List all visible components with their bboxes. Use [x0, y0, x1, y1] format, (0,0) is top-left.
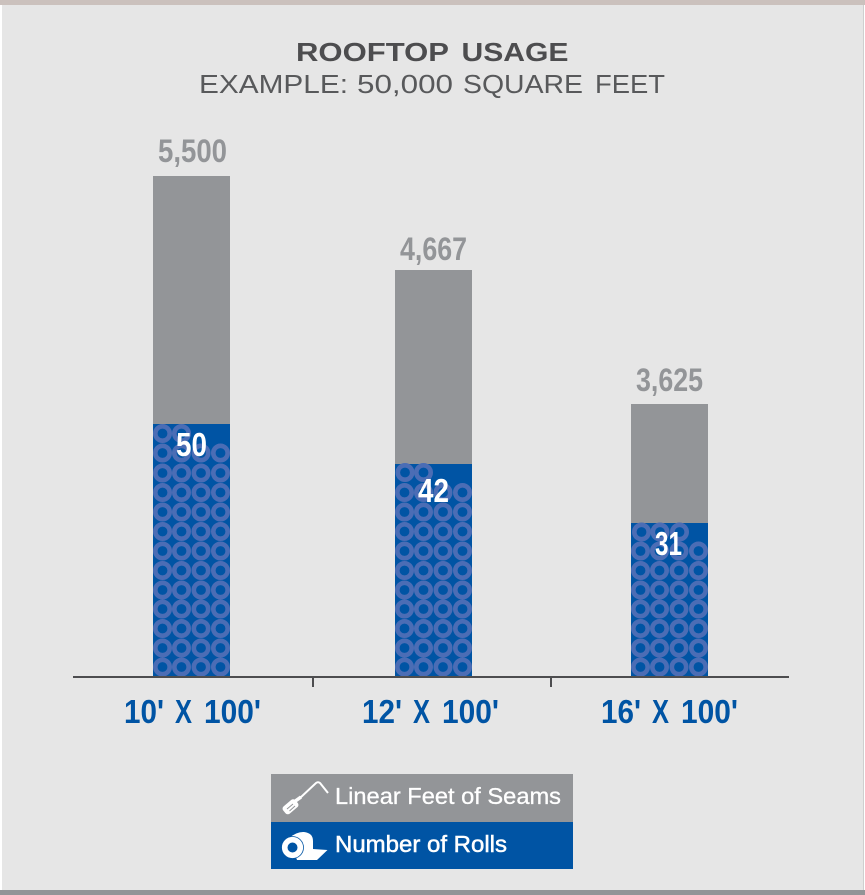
title: 50,000 [357, 71, 453, 99]
bar: 16' x 100': 31 [655, 525, 682, 562]
bar: 10' x 100': 50 [176, 426, 207, 463]
title: EXAMPLE: [199, 71, 348, 99]
legend row: linear feet of seams: Linear Feet of Seams [335, 783, 561, 809]
bar: 10' x 100' [153, 133, 230, 677]
legend row: number of rolls: Number of Rolls [335, 831, 507, 857]
axis labels: 100' [442, 693, 499, 730]
icon: welding torch [281, 782, 328, 816]
axis labels: 100' [681, 693, 738, 730]
axis labels: 10' [124, 693, 164, 730]
legend row: number of rolls [271, 822, 573, 869]
title: USAGE [462, 37, 568, 67]
bar: 12' x 100' [395, 231, 472, 677]
axis labels: 12' [362, 693, 402, 730]
axis labels: X [413, 693, 430, 730]
axis labels: 16' [601, 693, 641, 730]
axis labels [124, 693, 738, 730]
title [199, 37, 665, 99]
bar: 12' x 100': 4,667 [400, 231, 467, 267]
legend row: linear feet of seams [271, 774, 573, 822]
bar: 12' x 100': 42 [418, 472, 449, 509]
icon: roll [282, 832, 328, 860]
axis labels: X [652, 693, 669, 730]
bar: 16' x 100' [631, 362, 708, 677]
x axis [73, 676, 789, 687]
title: SQUARE [463, 71, 583, 99]
axis labels: X [175, 693, 192, 730]
axis labels: 100' [204, 693, 261, 730]
bar: 10' x 100': 5,500 [158, 133, 227, 169]
title: ROOFTOP [296, 37, 449, 67]
title: FEET [595, 71, 665, 99]
bar: 16' x 100': 3,625 [636, 362, 703, 398]
legend [271, 774, 573, 869]
